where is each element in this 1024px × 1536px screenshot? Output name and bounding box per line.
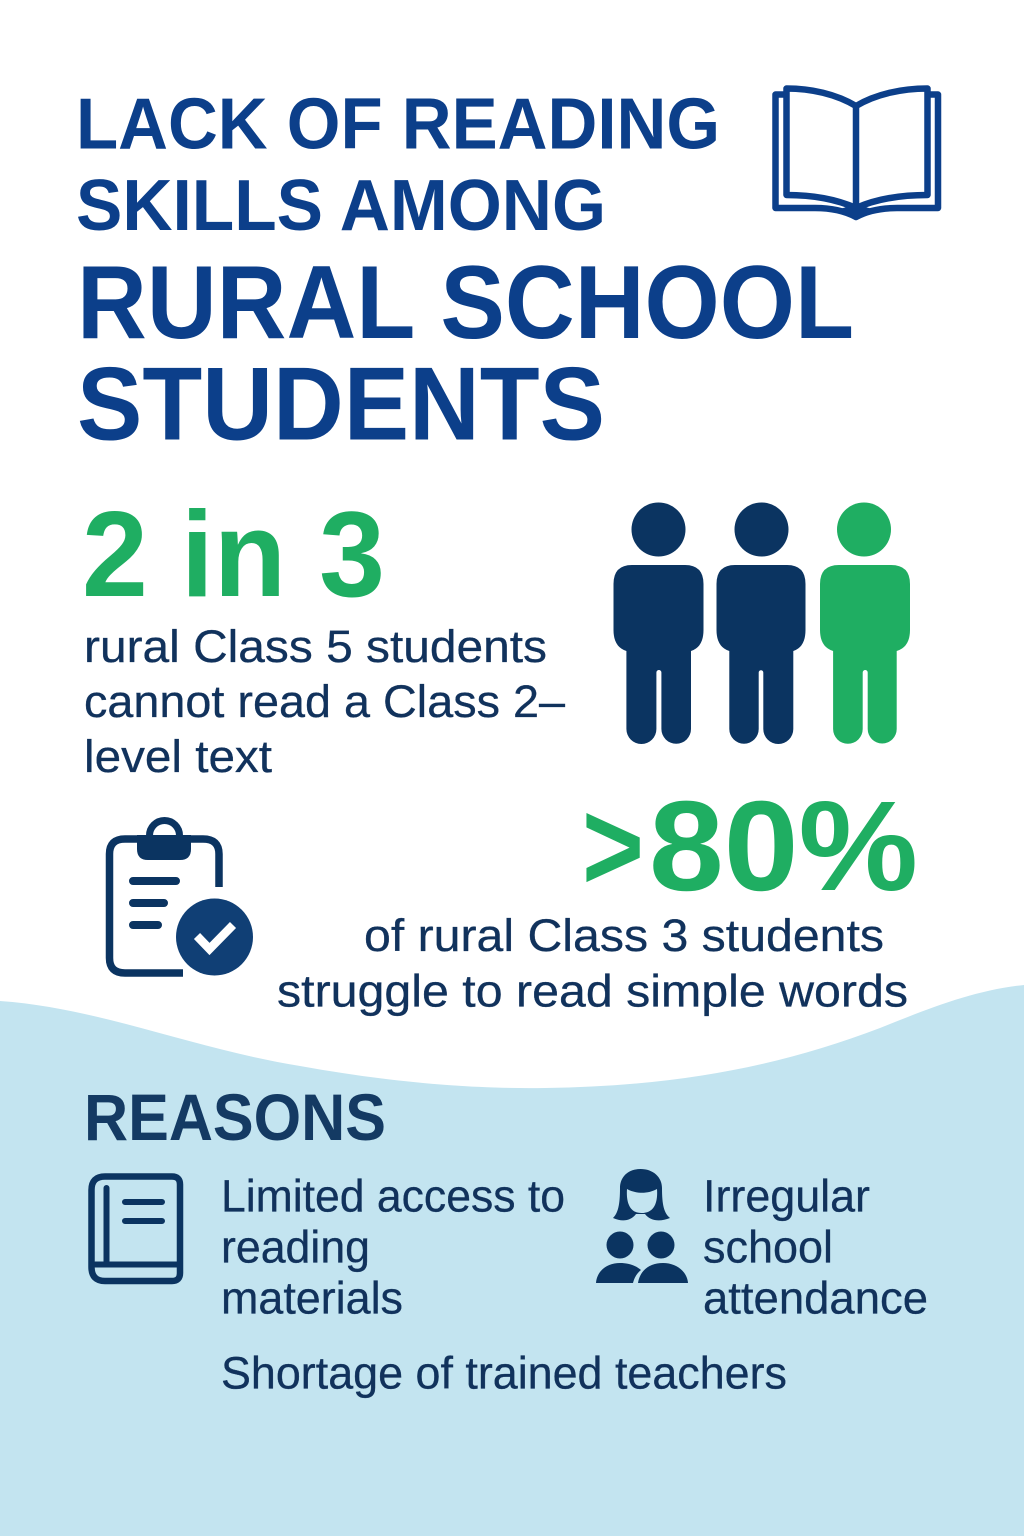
reason: irregular attendance — [703, 1170, 928, 1324]
reason: limited access — [221, 1170, 565, 1324]
reason: limited access: reading — [221, 1222, 370, 1272]
title: LACK OF READING — [76, 84, 720, 164]
reason: irregular attendance: attendance — [703, 1272, 928, 1324]
icon: teacher and two students — [596, 1169, 688, 1283]
big number >80%: 80% — [649, 775, 918, 918]
student 3 — [820, 502, 910, 744]
description 2 in 3: cannot read a Class 2– — [84, 676, 565, 727]
title: STUDENTS — [77, 346, 605, 462]
description 2 in 3: rural Class 5 students — [84, 621, 547, 672]
description >80%: struggle to read simple words — [277, 966, 908, 1016]
wave background panel — [0, 985, 1024, 1536]
reason: irregular attendance: Irregular — [703, 1170, 870, 1222]
big number 2 in 3: 2 in 3 — [82, 486, 385, 622]
description >80%: of rural Class 3 students — [364, 910, 884, 961]
statistic: 2 in 3 — [82, 486, 565, 782]
title: SKILLS AMONG — [76, 166, 606, 246]
description >80% — [277, 910, 908, 1016]
description 2 in 3 — [84, 621, 565, 782]
statistic: >80% — [277, 775, 918, 1016]
reason: limited access: Limited access to — [221, 1170, 565, 1222]
reason: teacher shortage: Shortage of trained teachers — [221, 1348, 787, 1398]
heading: reasons: REASONS — [84, 1080, 386, 1154]
icon: open book — [776, 88, 938, 219]
icon: book — [92, 1176, 180, 1281]
title: RURAL SCHOOL — [77, 245, 854, 361]
student 1 — [614, 502, 704, 744]
icon: clipboard with check — [110, 820, 253, 976]
icon: three students, two navy and one green — [614, 502, 910, 744]
student 2 — [716, 502, 806, 744]
title — [76, 84, 854, 462]
description 2 in 3: level text — [84, 731, 273, 782]
reason: irregular attendance: school — [703, 1222, 833, 1272]
big number >80%: > — [582, 775, 644, 918]
reason: limited access: materials — [221, 1272, 403, 1324]
